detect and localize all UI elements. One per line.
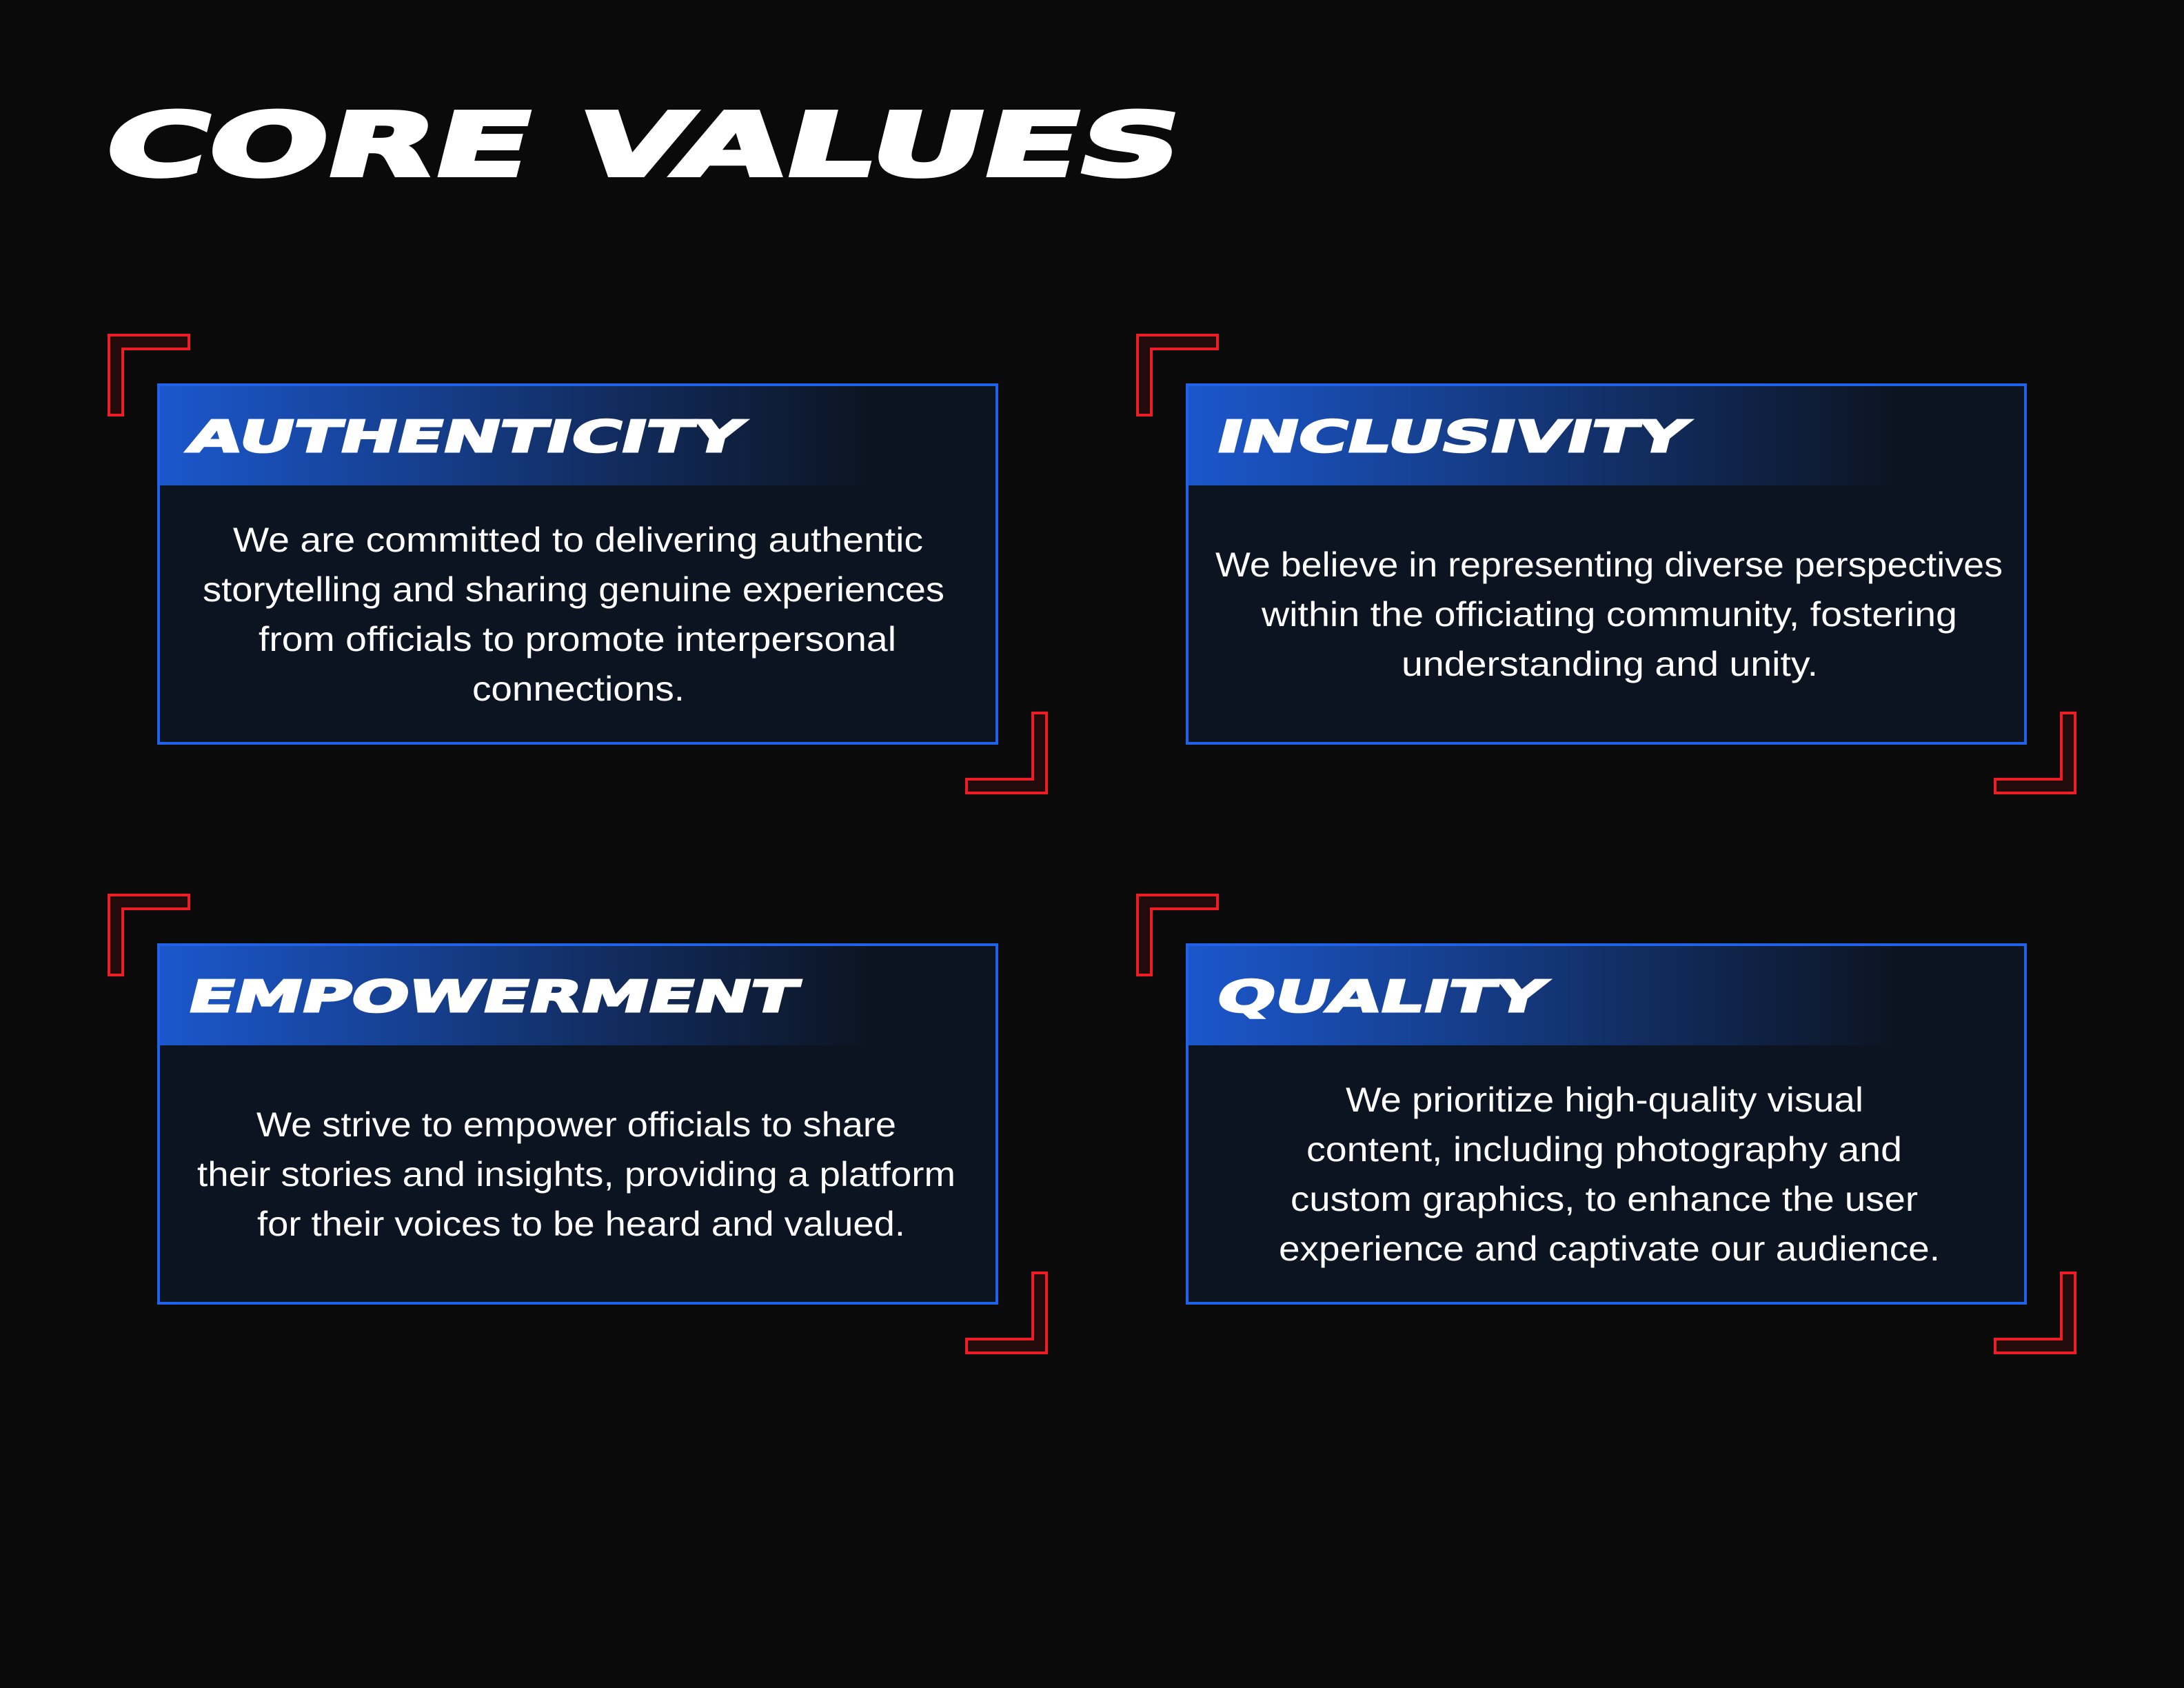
panel: authenticity	[109, 335, 1046, 793]
panel: empowerment	[109, 895, 1046, 1353]
corner bracket: top left	[109, 335, 189, 415]
card background	[159, 945, 997, 1303]
body text: empowerment	[197, 1105, 956, 1243]
corner bracket: bottom right	[1995, 713, 2075, 793]
panel: quality	[1138, 895, 2075, 1353]
corner bracket: bottom right	[1995, 1273, 2075, 1353]
body text: empowerment: their stories and insights, providing a platform	[197, 1155, 956, 1194]
body text: authenticity: connections.	[472, 670, 685, 708]
body text: empowerment: We strive to empower officials to share	[256, 1105, 896, 1144]
heading: inclusivity: INCLUSIVITY	[1211, 412, 1693, 463]
body text: authenticity: from officials to promote interpersonal	[259, 620, 896, 659]
header gradient band	[1189, 386, 1899, 485]
heading: quality: QUALITY	[1211, 972, 1551, 1023]
corner bracket: top left	[1138, 335, 1217, 415]
body text: inclusivity: within the officiating community, fostering	[1261, 595, 1957, 634]
card background	[1187, 385, 2025, 743]
corner bracket: bottom right	[967, 713, 1046, 793]
header gradient band	[160, 386, 870, 485]
body text: quality: custom graphics, to enhance the user	[1291, 1180, 1918, 1218]
header gradient band	[160, 946, 870, 1045]
body text: quality	[1279, 1081, 1940, 1268]
body text: quality: We prioritize high-quality visual	[1346, 1081, 1863, 1119]
body text: inclusivity	[1215, 545, 2003, 683]
body text: quality: experience and captivate our audience.	[1279, 1229, 1940, 1268]
body text: authenticity: storytelling and sharing genuine experiences	[203, 570, 944, 609]
corner bracket: top left	[109, 895, 189, 975]
body text: quality: content, including photography and	[1306, 1130, 1902, 1169]
body text: inclusivity: We believe in representing diverse perspectives	[1215, 545, 2003, 584]
title: CORE VALUES	[94, 95, 1193, 197]
body text: authenticity: We are committed to delivering authentic	[233, 521, 923, 559]
card background	[159, 385, 997, 743]
body text: authenticity	[203, 521, 944, 708]
panel: inclusivity	[1138, 335, 2075, 793]
corner bracket: bottom right	[967, 1273, 1046, 1353]
heading: authenticity: AUTHENTICITY	[183, 412, 749, 463]
card background	[1187, 945, 2025, 1303]
heading: empowerment: EMPOWERMENT	[183, 972, 804, 1023]
header gradient band	[1189, 946, 1899, 1045]
corner bracket: top left	[1138, 895, 1217, 975]
body text: inclusivity: understanding and unity.	[1402, 645, 1818, 683]
body text: empowerment: for their voices to be heard and valued.	[257, 1205, 905, 1243]
